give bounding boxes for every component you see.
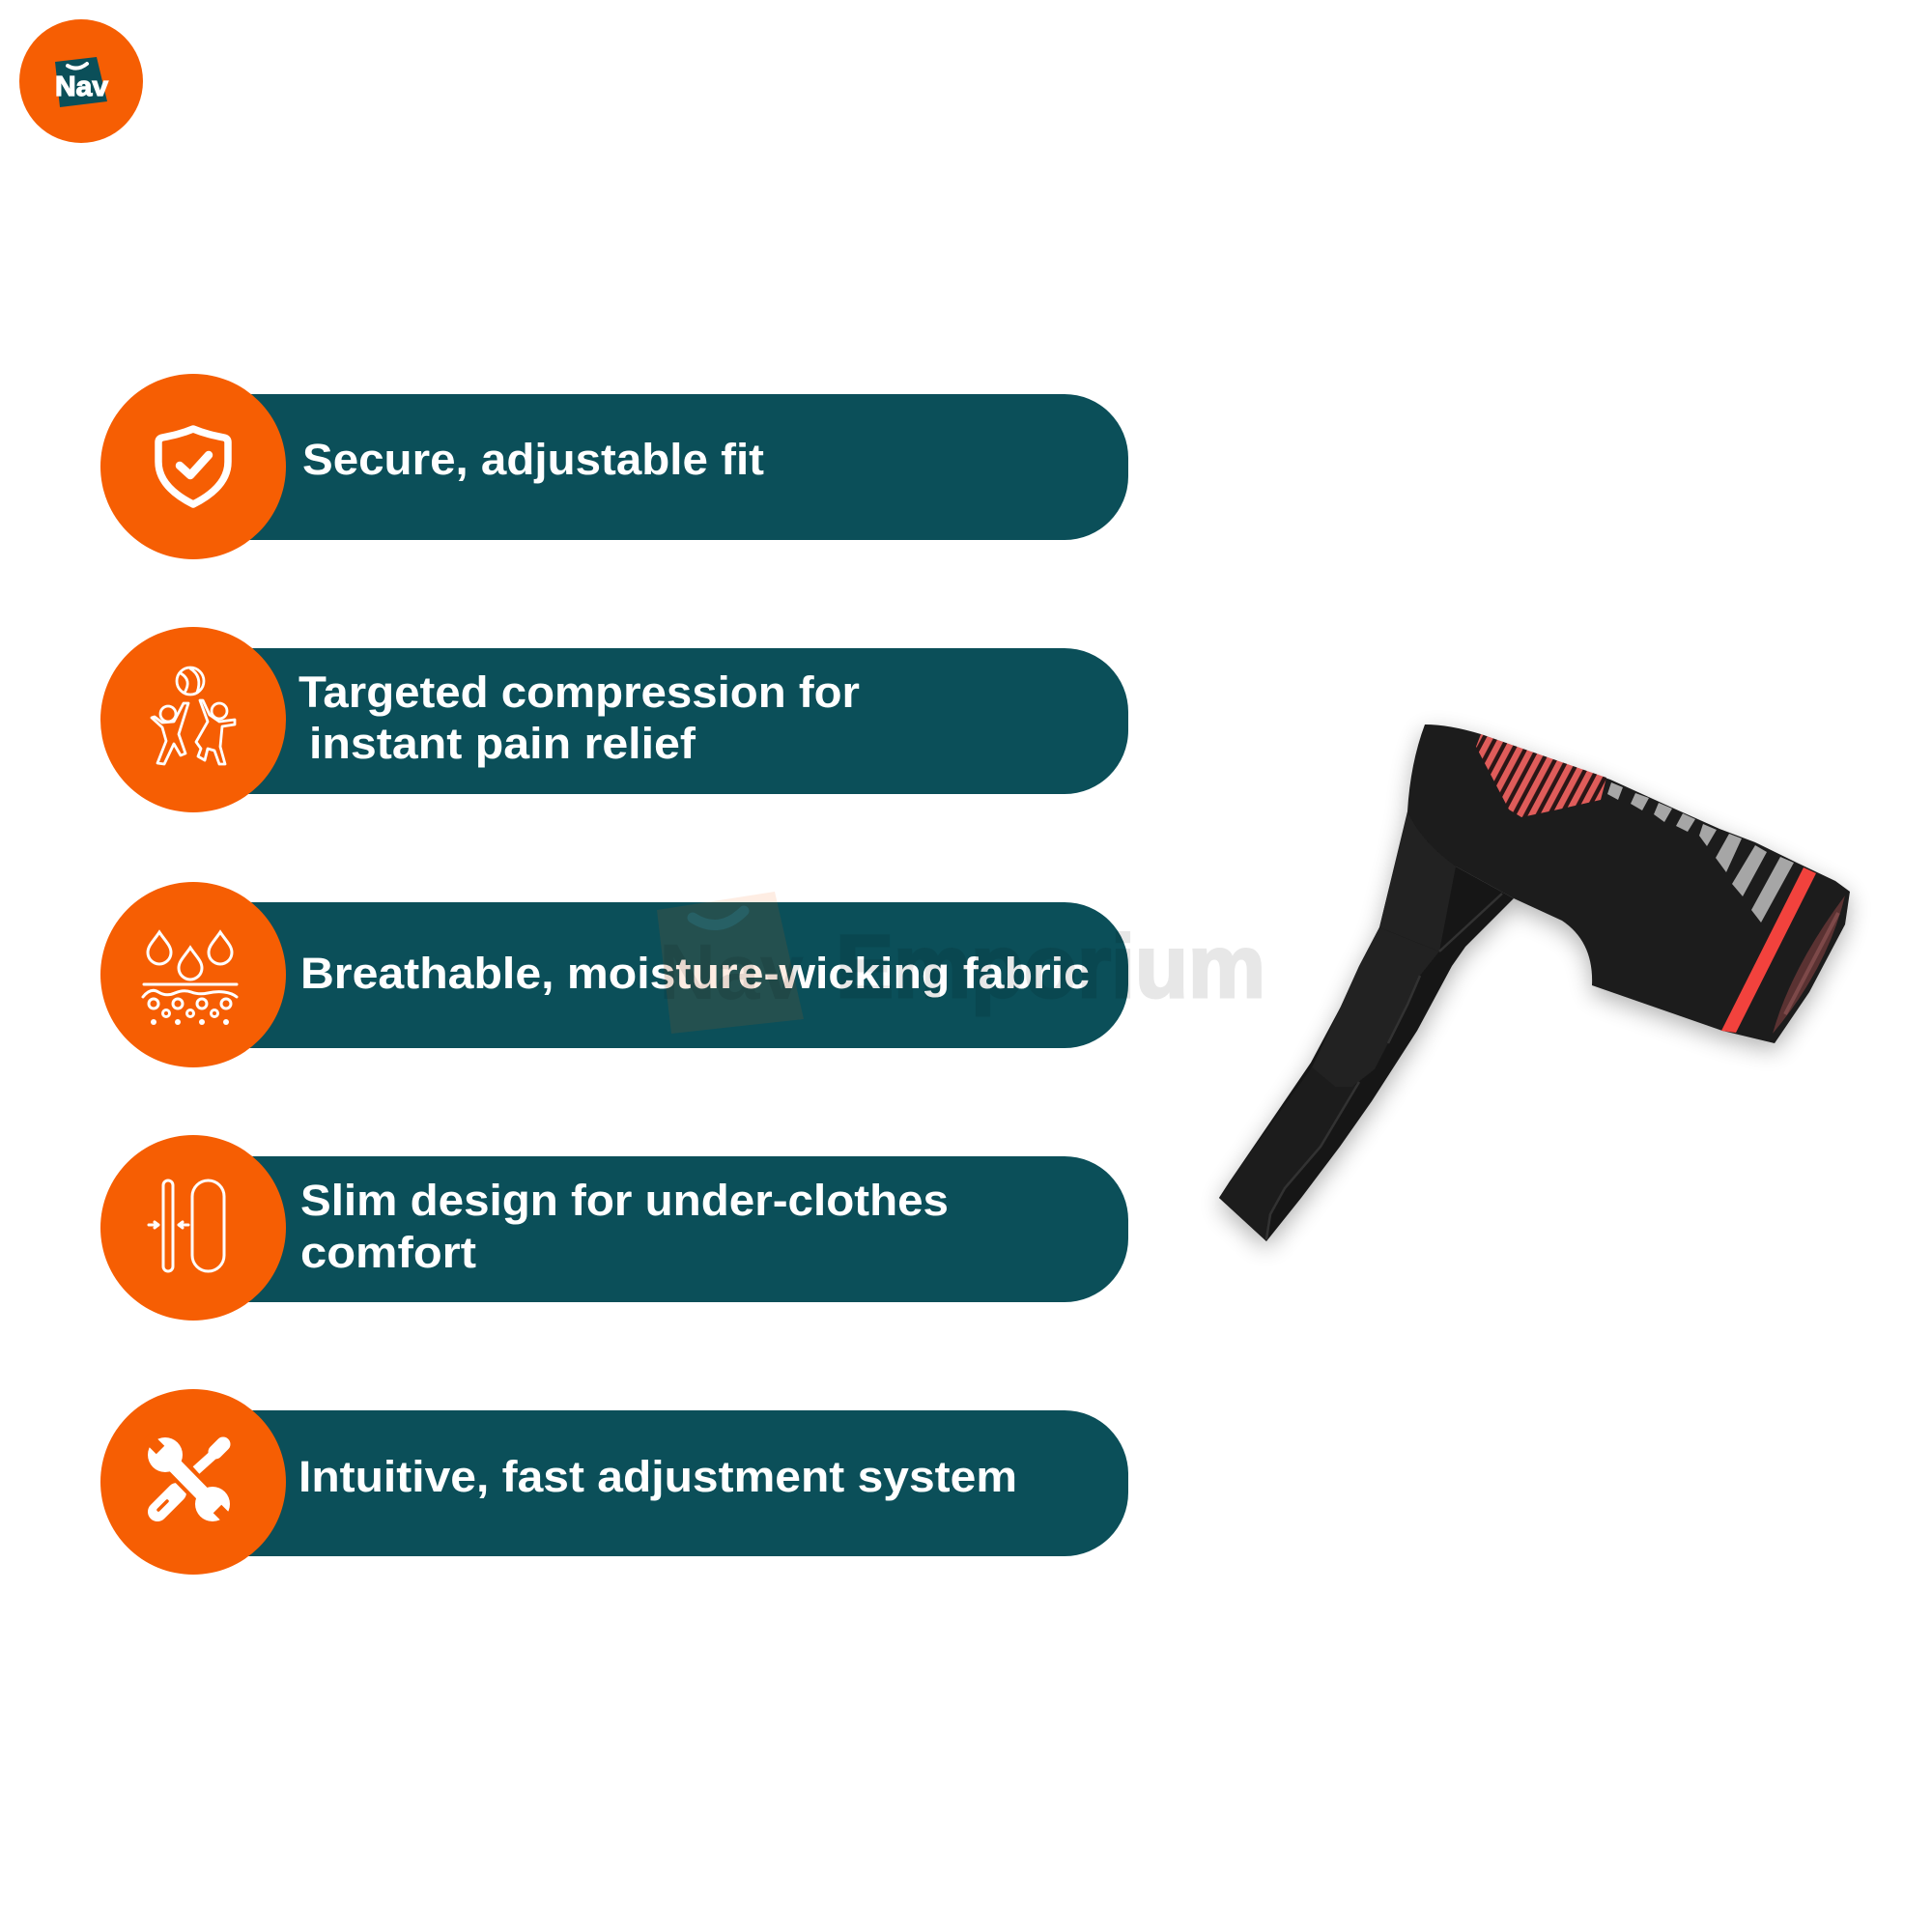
watermark wordmark: Emporium: [836, 918, 1265, 1016]
icon: children playing with ball: [152, 668, 235, 764]
feature row 5: fast adjustment: Intuitive, fast adjustment system: [298, 1452, 1017, 1501]
watermark: Nav Emporium: [657, 892, 1265, 1034]
feature row 4: slim design: [100, 1135, 1128, 1321]
watermark logo square: [657, 892, 804, 1034]
feature row 1: secure fit: Secure, adjustable fit: [302, 435, 764, 484]
feature row 1: secure fit: [100, 374, 1128, 559]
strap upper panel: [1379, 813, 1456, 952]
icon: droplets over fabric layers: [143, 932, 237, 1025]
strap fold lines: [1266, 894, 1502, 1239]
strap: [1219, 811, 1514, 1241]
strap lower velcro tab: [1312, 927, 1439, 1087]
sleeve inner opening: [1773, 895, 1845, 1034]
feature row 3: breathable fabric: Breathable, moisture-wicking fabric: [300, 949, 1090, 998]
watermark Nav mark: Nav: [659, 928, 804, 1016]
strap loop end: [1219, 1067, 1359, 1241]
feature row 2: targeted compression: [100, 627, 1128, 812]
feature row 4: slim design: Slim design for under-clothes: [300, 1176, 949, 1225]
product: shoulder compression brace: [1219, 724, 1850, 1241]
icon: slim profile comparison: [149, 1180, 224, 1271]
feature row 5: fast adjustment: [100, 1389, 1128, 1575]
feature row 2: targeted compression: Targeted compression for: [298, 668, 860, 717]
red stripe patch: [1476, 734, 1606, 817]
brand logo badge: [19, 19, 143, 143]
sleeve body: [1407, 724, 1850, 1043]
feature row 4: slim design: comfort: [300, 1228, 476, 1277]
grey reflective blocks: [1607, 782, 1794, 923]
icon: crossed wrench and screwdriver: [147, 1436, 231, 1522]
red band: [1721, 867, 1816, 1033]
feature row 3: breathable fabric: [100, 882, 1128, 1067]
feature row 2: targeted compression: instant pain relief: [309, 719, 696, 768]
icon: shield with check: [158, 429, 228, 504]
brand logo badge: Nav: [55, 71, 108, 102]
watermark smile: [693, 911, 744, 925]
